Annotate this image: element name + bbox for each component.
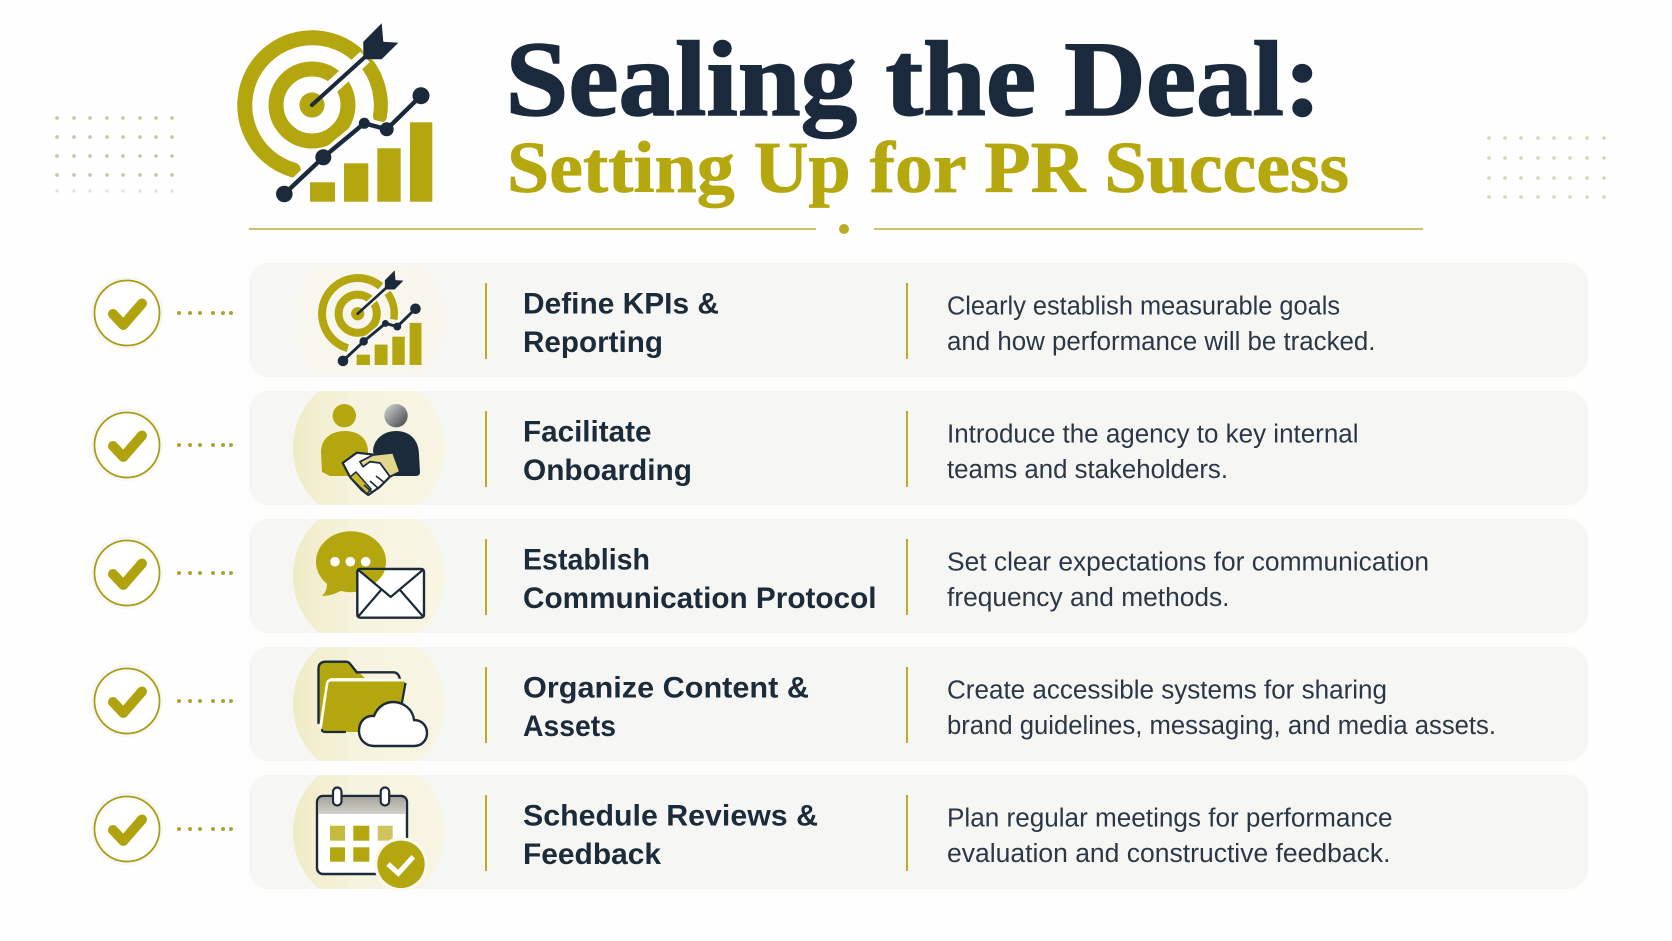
description: Clearly establish measurable goals: [947, 292, 1340, 320]
icon: calendar with check badge: [317, 788, 428, 891]
row 5: check marker: [91, 793, 233, 865]
heading: Assets: [523, 710, 616, 743]
icon: two people shaking hands: [321, 404, 420, 495]
decorative dot grid right: [1487, 136, 1606, 199]
panel: Establish Communication Protocol: [249, 519, 1588, 633]
description: Set clear expectations for communication: [947, 548, 1429, 576]
icon: speech bubble and envelope: [316, 531, 424, 618]
heading: Organize Content &: [523, 672, 809, 704]
description: Plan regular meetings for performance: [947, 804, 1392, 832]
title: Sealing the Deal:: [506, 21, 1322, 139]
heading: Feedback: [523, 838, 662, 871]
description: brand guidelines, messaging, and media assets.: [947, 712, 1496, 740]
heading: Communication Protocol: [523, 582, 876, 615]
row 2: check marker: [91, 409, 233, 481]
row 1: check marker: [91, 277, 233, 349]
subtitle: Setting Up for PR Success: [507, 127, 1349, 208]
heading: Onboarding: [523, 454, 692, 487]
description: frequency and methods.: [947, 584, 1230, 612]
row 3: check marker: [91, 537, 233, 609]
description: evaluation and constructive feedback.: [947, 840, 1390, 868]
description: teams and stakeholders.: [947, 456, 1228, 484]
heading: Define KPIs &: [523, 288, 719, 320]
description: Create accessible systems for sharing: [947, 676, 1387, 704]
panel: Organize Content and Assets: [249, 647, 1588, 761]
description: and how performance will be tracked.: [947, 328, 1376, 356]
heading: Establish: [523, 544, 650, 576]
description: Introduce the agency to key internal: [947, 420, 1358, 448]
panel: Facilitate Onboarding: [249, 391, 1588, 505]
panel: Schedule Reviews and Feedback: [249, 775, 1588, 891]
icon: target with arrow and growth chart: [245, 23, 432, 202]
row 4: check marker: [91, 665, 233, 737]
header divider: [249, 224, 1423, 234]
heading: Schedule Reviews &: [523, 800, 818, 832]
icon: target and chart small: [322, 270, 421, 366]
heading: Facilitate: [523, 416, 652, 448]
panel: Define KPIs and Reporting: [249, 263, 1588, 377]
icon: folder and cloud: [318, 662, 427, 746]
heading: Reporting: [523, 326, 663, 359]
decorative dot grid left: [55, 116, 174, 193]
